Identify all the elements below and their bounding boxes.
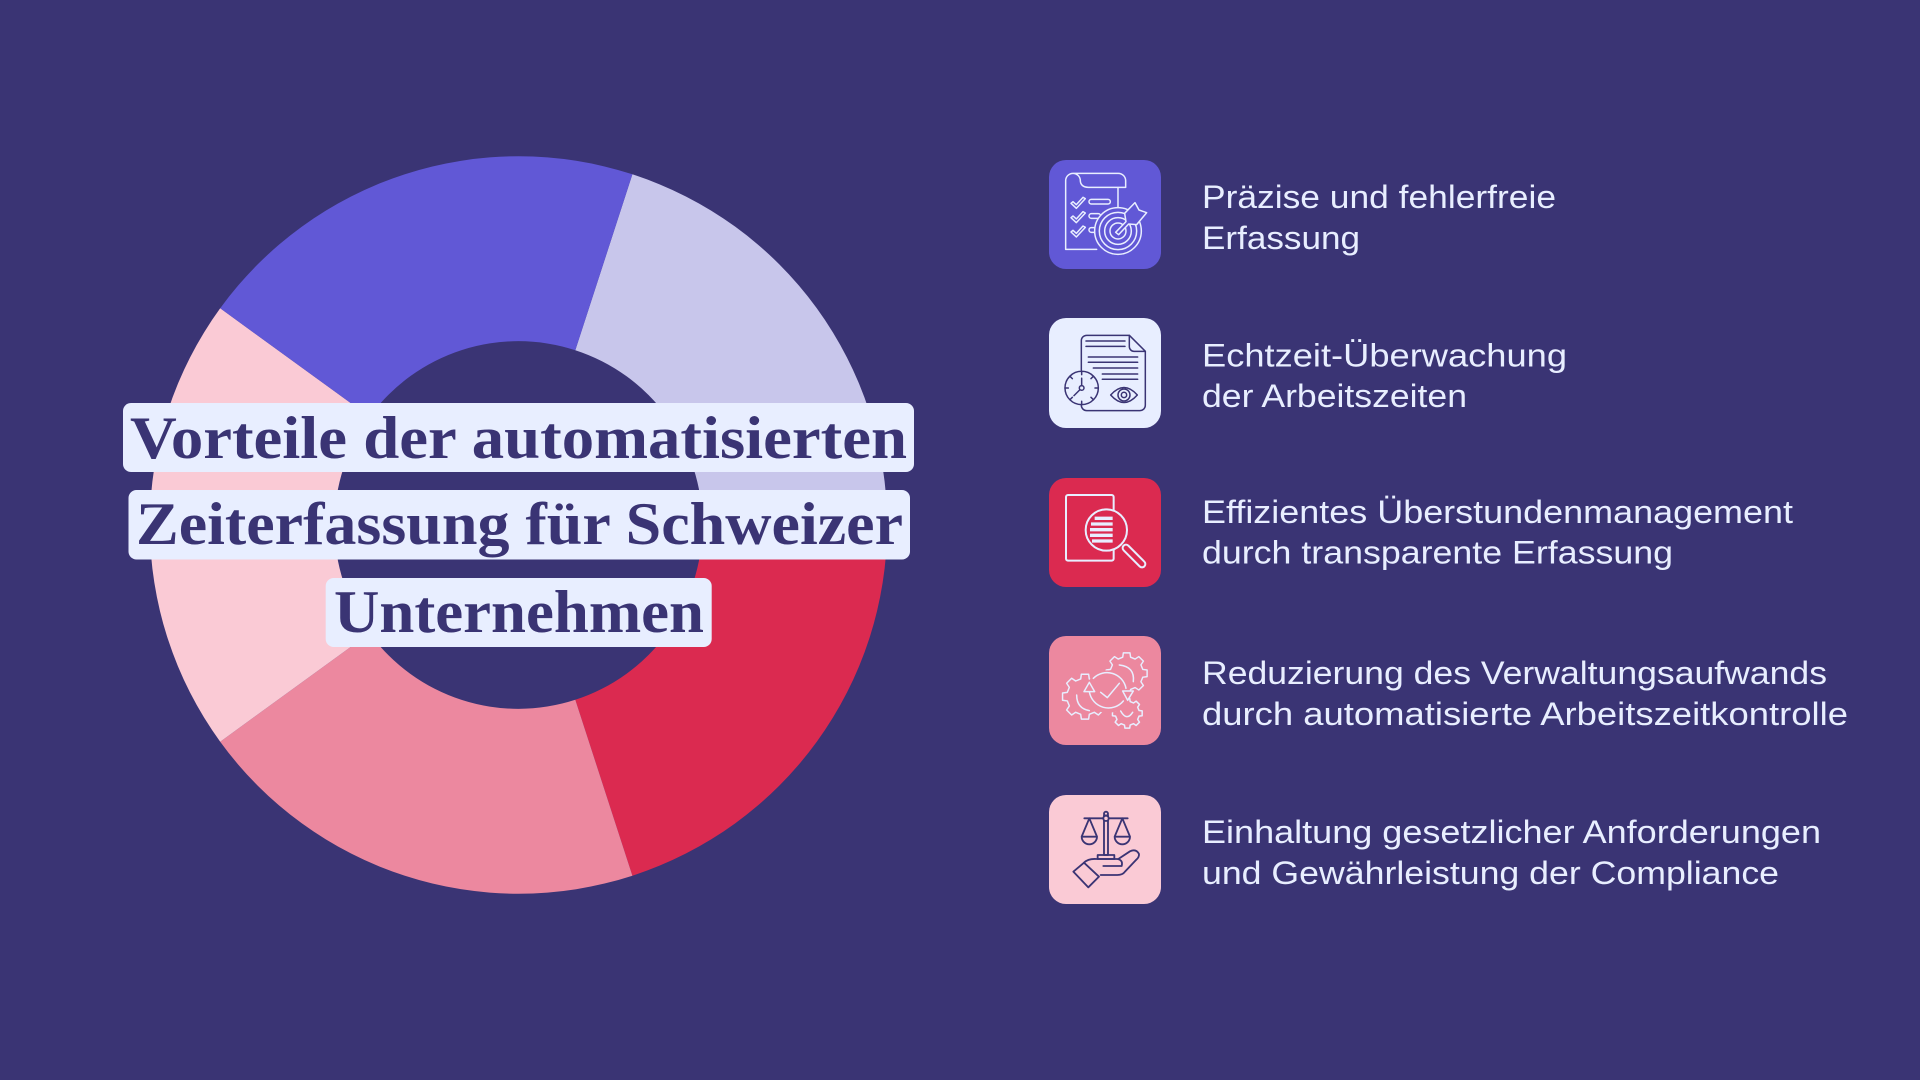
benefit 2 text: Echtzeit-Überwachung xyxy=(1202,338,1567,374)
icon: document with clock and eye xyxy=(1049,318,1161,428)
benefit 5 text xyxy=(1202,814,1821,891)
benefit 3 text: durch transparente Erfassung xyxy=(1202,534,1673,570)
icon: document with magnifier xyxy=(1049,478,1161,587)
benefit 2 xyxy=(1049,318,1567,428)
benefit 2 text: der Arbeitszeiten xyxy=(1202,378,1467,414)
segment: light pink xyxy=(150,308,370,742)
segment: lavender xyxy=(575,174,887,525)
benefit 1 text: Präzise und fehlerfreie xyxy=(1202,179,1556,215)
benefit 5 text: Einhaltung gesetzlicher Anforderungen xyxy=(1202,814,1821,850)
benefit 4 text: durch automatisierte Arbeitszeitkontrolle xyxy=(1202,696,1848,732)
benefit 2 text xyxy=(1202,338,1567,414)
benefit 4 text: Reduzierung des Verwaltungsaufwands xyxy=(1202,655,1827,691)
benefit 4 text xyxy=(1202,655,1848,732)
benefit 3 text: Effizientes Überstundenmanagement xyxy=(1202,494,1793,530)
title line 3: Unternehmen xyxy=(334,579,704,645)
icon: scales on hand xyxy=(1049,795,1161,904)
segment: rose xyxy=(220,633,632,894)
benefit 5 xyxy=(1049,795,1821,904)
segment: violet xyxy=(220,156,632,417)
title line 2: Zeiterfassung für Schweizer xyxy=(136,491,903,557)
title line 1: Vorteile der automatisierten xyxy=(130,405,907,471)
benefit 1 text: Erfassung xyxy=(1202,220,1360,256)
benefit 1 text xyxy=(1202,179,1556,256)
benefit 3 text xyxy=(1202,494,1793,570)
icon: gears with check xyxy=(1049,636,1161,745)
benefit 1 xyxy=(1049,160,1556,269)
donut chart xyxy=(150,156,887,894)
benefit 3 xyxy=(1049,478,1793,587)
title xyxy=(123,403,914,647)
benefit 4 xyxy=(1049,636,1848,745)
icon: checklist with target xyxy=(1049,160,1161,269)
benefit 5 text: und Gewährleistung der Compliance xyxy=(1202,855,1779,891)
segment: red xyxy=(575,525,887,876)
